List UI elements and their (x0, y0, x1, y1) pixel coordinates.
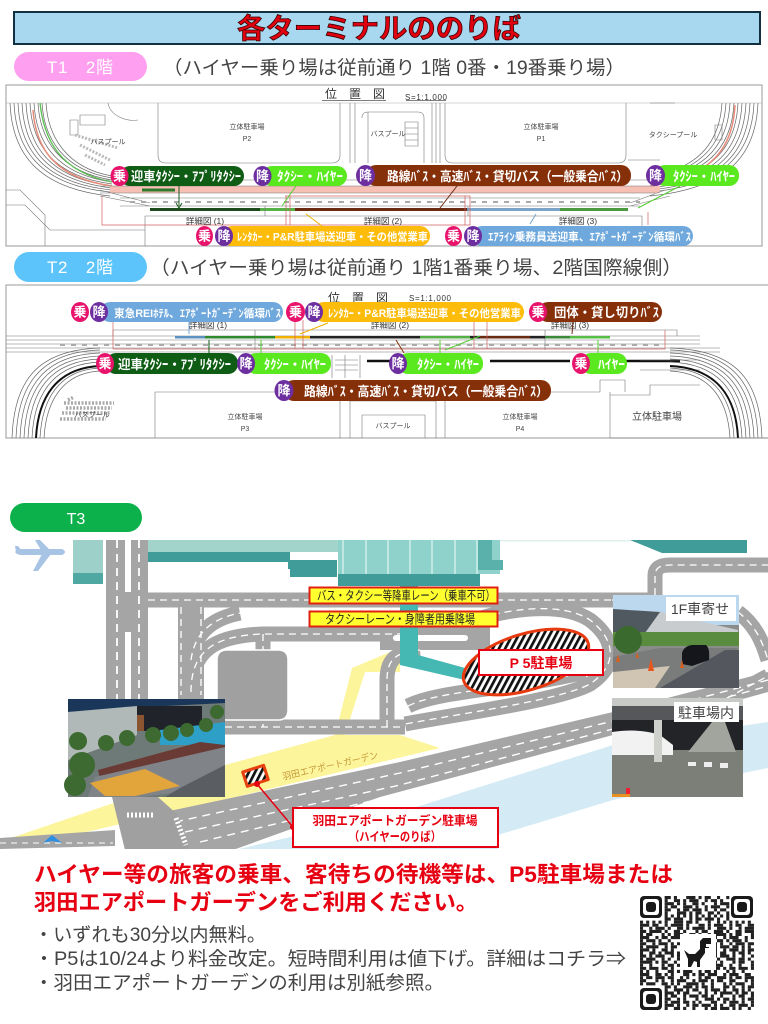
T2 buildings: 立体駐車場 (502, 412, 538, 421)
headline notice: ハイヤー等の旅客の乗車、客待ちの待機等は、P5駐車場または (34, 862, 673, 887)
T1 caption: （ハイヤー乗り場は従前通り 1階 0番・19番乗り場） (163, 57, 625, 79)
T1 detail boxes: 詳細図 (1) (186, 216, 224, 226)
T1 taxi drop label 1: ﾀｸｼｰ・ﾊｲﾔｰ (277, 169, 343, 184)
T1 rental car label: ﾚﾝﾀｶｰ・P&R駐車場送迎車・その他営業車 (237, 230, 428, 244)
red leader line (254, 782, 296, 830)
T2 taxi drop label 2: ﾀｸｼｰ・ﾊｲﾔｰ (417, 357, 479, 372)
T1 plan heading: 位 置 図 (325, 87, 385, 101)
QR finder bottom-left (640, 988, 662, 1010)
T1 taxi drop label 2: 降 (649, 168, 662, 183)
T2 charter bus label: 団体・貸し切りﾊﾞｽ (554, 305, 659, 320)
T2 curved roads (12, 348, 762, 438)
T2 buildings: バスプール (74, 411, 110, 419)
icon: airplane (15, 540, 65, 571)
vertical road (106, 540, 148, 705)
T2 taxi drop label 2 (389, 353, 483, 374)
T2 bus label: 路線ﾊﾞｽ・高速ﾊﾞｽ・貸切バス（一般乗合ﾊﾞｽ） (304, 384, 548, 399)
T2 Tokyu hotel label: 乗 (73, 304, 87, 320)
T1 road band (100, 180, 670, 211)
T2 taxi drop label 1: 降 (239, 356, 253, 371)
T1 detail boxes: 詳細図 (2) (364, 216, 402, 226)
T1 airline staff label: 降 (466, 228, 480, 244)
garden yellow area (5, 648, 440, 840)
T2 charter bus label (529, 302, 662, 322)
T2 detail labels: 詳細図 (1) (189, 320, 227, 330)
title banner: 各ターミナルののりば (237, 13, 521, 44)
T1 bus label (356, 165, 631, 186)
T1 rental car label (196, 226, 430, 246)
T1 airline staff label: ｴｱﾗｲﾝ乗務員送迎車、ｴｱﾎﾟｰﾄｶﾞｰﾃﾞﾝ循環ﾊﾞｽ (488, 230, 691, 244)
T3 tag: T3 (67, 511, 85, 528)
T2 buildings (74, 380, 768, 438)
T2 Tokyu hotel label: 東急REIﾎﾃﾙ、ｴｱﾎﾟｰﾄｶﾞｰﾃﾞﾝ循環ﾊﾞｽ (114, 306, 281, 320)
crossroads (112, 797, 190, 850)
headline notice (34, 862, 673, 915)
notes list: ・P5は10/24より料金改定。短時間利用は値下げ。詳細はコチラ⇒ (34, 948, 626, 970)
T1 site plan (6, 85, 762, 246)
T2 buildings: 立体駐車場 (632, 410, 682, 423)
T2 tag: T2 2階 (47, 258, 113, 277)
T2 taxi drop label 1 (237, 353, 331, 374)
notes list: ・いずれも30分以内無料。 (34, 924, 266, 946)
T2 hire pickup label: ﾊｲﾔｰ (598, 357, 625, 372)
T2 rental car label: 降 (307, 304, 321, 320)
P5 label (479, 650, 603, 675)
photo caption: 1F (666, 597, 736, 621)
T1 pickup dark green label (110, 166, 244, 186)
T1 building labels (90, 122, 697, 146)
T2 arrows (189, 322, 598, 353)
T2 hire pickup label: 乗 (574, 356, 588, 371)
T2 plan heading: S=1:1,000 (409, 294, 452, 303)
T1 taxi drop label 2 (646, 165, 739, 186)
T2 pickup dark green label: 乗 (98, 356, 112, 371)
T2 taxi drop label 2: 降 (391, 356, 405, 371)
T1 rental car label: 降 (217, 228, 231, 244)
notes list (34, 924, 626, 994)
T2 rental car label: ﾚﾝﾀｶｰ・P&R駐車場送迎車・その他営業車 (328, 306, 521, 320)
T1 rental car label: 乗 (198, 228, 211, 244)
P5 label: P 5駐車場 (510, 655, 572, 671)
T1 bus label: 路線ﾊﾞｽ・高速ﾊﾞｽ・貸切バス（一般乗合ﾊﾞｽ） (387, 169, 628, 184)
photo: airport garden (64, 699, 225, 797)
T1 detail boxes: 詳細図 (3) (559, 216, 597, 226)
photo caption: parking (674, 702, 739, 722)
central parking block (217, 650, 288, 720)
garden map label: 羽田エアポートガーデン (281, 749, 379, 783)
T2 hire pickup label (572, 353, 627, 374)
T2 detail labels: 詳細図 (3) (551, 320, 589, 330)
T2 taxi drop label 1: ﾀｸｼｰ・ﾊｲﾔｰ (264, 357, 326, 372)
QR code (640, 896, 754, 1010)
P5 parking ellipse (462, 628, 590, 696)
T1 building labels: バスプール (90, 138, 126, 146)
T1 taxi drop label 2: ﾀｸｼｰ・ﾊｲﾔｰ (673, 169, 735, 184)
photo: parking interior (612, 698, 743, 797)
bus lane label (310, 588, 498, 604)
T2 rental car label: 乗 (289, 304, 302, 320)
T2 charter bus label: 乗 (531, 304, 545, 320)
T1 pickup dark green label: 迎車ﾀｸｼｰ・ｱﾌﾟﾘﾀｸｼｰ (131, 169, 241, 184)
garden hatched marker (241, 763, 270, 788)
icon: dinosaur (680, 934, 716, 970)
photo caption: 1F: 1F車寄せ (671, 601, 729, 617)
taxi lane label: タクシーレーン・身障者用乗降場 (325, 612, 475, 626)
blue marker (43, 835, 62, 843)
T2 rental car label (286, 302, 524, 322)
T1 taxi drop label 1: 降 (256, 168, 269, 184)
T1 plan heading: S=1:1,000 (405, 93, 448, 102)
T2 detail labels: 詳細図 (2) (371, 320, 409, 330)
T1 airline staff label (445, 226, 693, 246)
T3 tag (10, 503, 142, 532)
QR finder top-right (731, 896, 753, 918)
headline notice: 羽田エアポートガーデンをご利用ください。 (34, 890, 478, 915)
title banner (14, 12, 760, 44)
photo caption: parking: 駐車場内 (678, 705, 734, 721)
T2 Tokyu hotel label (71, 302, 283, 322)
T1 bus label: 降 (359, 168, 372, 183)
T1 building labels: バスプール (370, 130, 406, 138)
T1 airline staff label: 乗 (447, 228, 460, 244)
T1 detail boxes (102, 196, 648, 246)
T1 plan heading (322, 87, 448, 102)
T2 buildings: 立体駐車場 (228, 412, 262, 421)
T1 building labels: P1 (537, 136, 545, 143)
T2 buildings: P3 (241, 426, 249, 433)
garden parking label (293, 808, 498, 847)
garden parking label: 羽田エアポートガーデン駐車場 (312, 813, 478, 828)
T1 building labels: 立体駐車場 (230, 122, 264, 131)
T2 caption: （ハイヤー乗り場は従前通り 1階1番乗り場、2階国際線側） (150, 257, 682, 279)
T2 buildings: P4 (516, 426, 524, 433)
T3 map (0, 540, 768, 850)
T2 bus label (274, 380, 551, 401)
river (235, 722, 768, 850)
bus lane label: バス・タクシー等降車レーン（乗車不可） (317, 588, 495, 603)
T1 tag: T1 2階 (47, 58, 113, 77)
T2 Tokyu hotel label: 降 (92, 304, 106, 320)
T2 bus label: 降 (277, 383, 291, 398)
T1 building labels: 立体駐車場 (524, 122, 558, 131)
garden parking label: （ハイヤーのりば） (349, 829, 441, 844)
T2 road band (6, 320, 720, 378)
QR finder top-left (640, 896, 662, 918)
T1 tag (14, 52, 147, 81)
notes list: ・羽田エアポートガーデンの利用は別紙参照。 (34, 972, 444, 994)
T1 arrows (176, 186, 680, 226)
T1 building labels: タクシープール (649, 130, 697, 139)
T1 building labels: P2 (243, 136, 251, 143)
T1 pickup dark green label: 乗 (113, 168, 126, 184)
T2 tag (14, 252, 147, 282)
T2 detail labels (189, 320, 589, 330)
T2 pickup dark green label: 迎車ﾀｸｼｰ・ｱﾌﾟﾘﾀｸｼｰ (118, 357, 231, 372)
photo: 1F curbside (613, 595, 739, 688)
terminal buildings (73, 540, 747, 586)
T2 buildings: バスプール (376, 422, 410, 430)
T2 site plan (6, 285, 768, 438)
T2 plan heading (325, 291, 452, 305)
T2 plan heading: 位 置 図 (328, 291, 388, 305)
T1 taxi drop label 1 (254, 166, 347, 186)
T2 pickup dark green label (96, 353, 238, 374)
P5 access bridge (400, 630, 465, 680)
road network (0, 565, 768, 850)
